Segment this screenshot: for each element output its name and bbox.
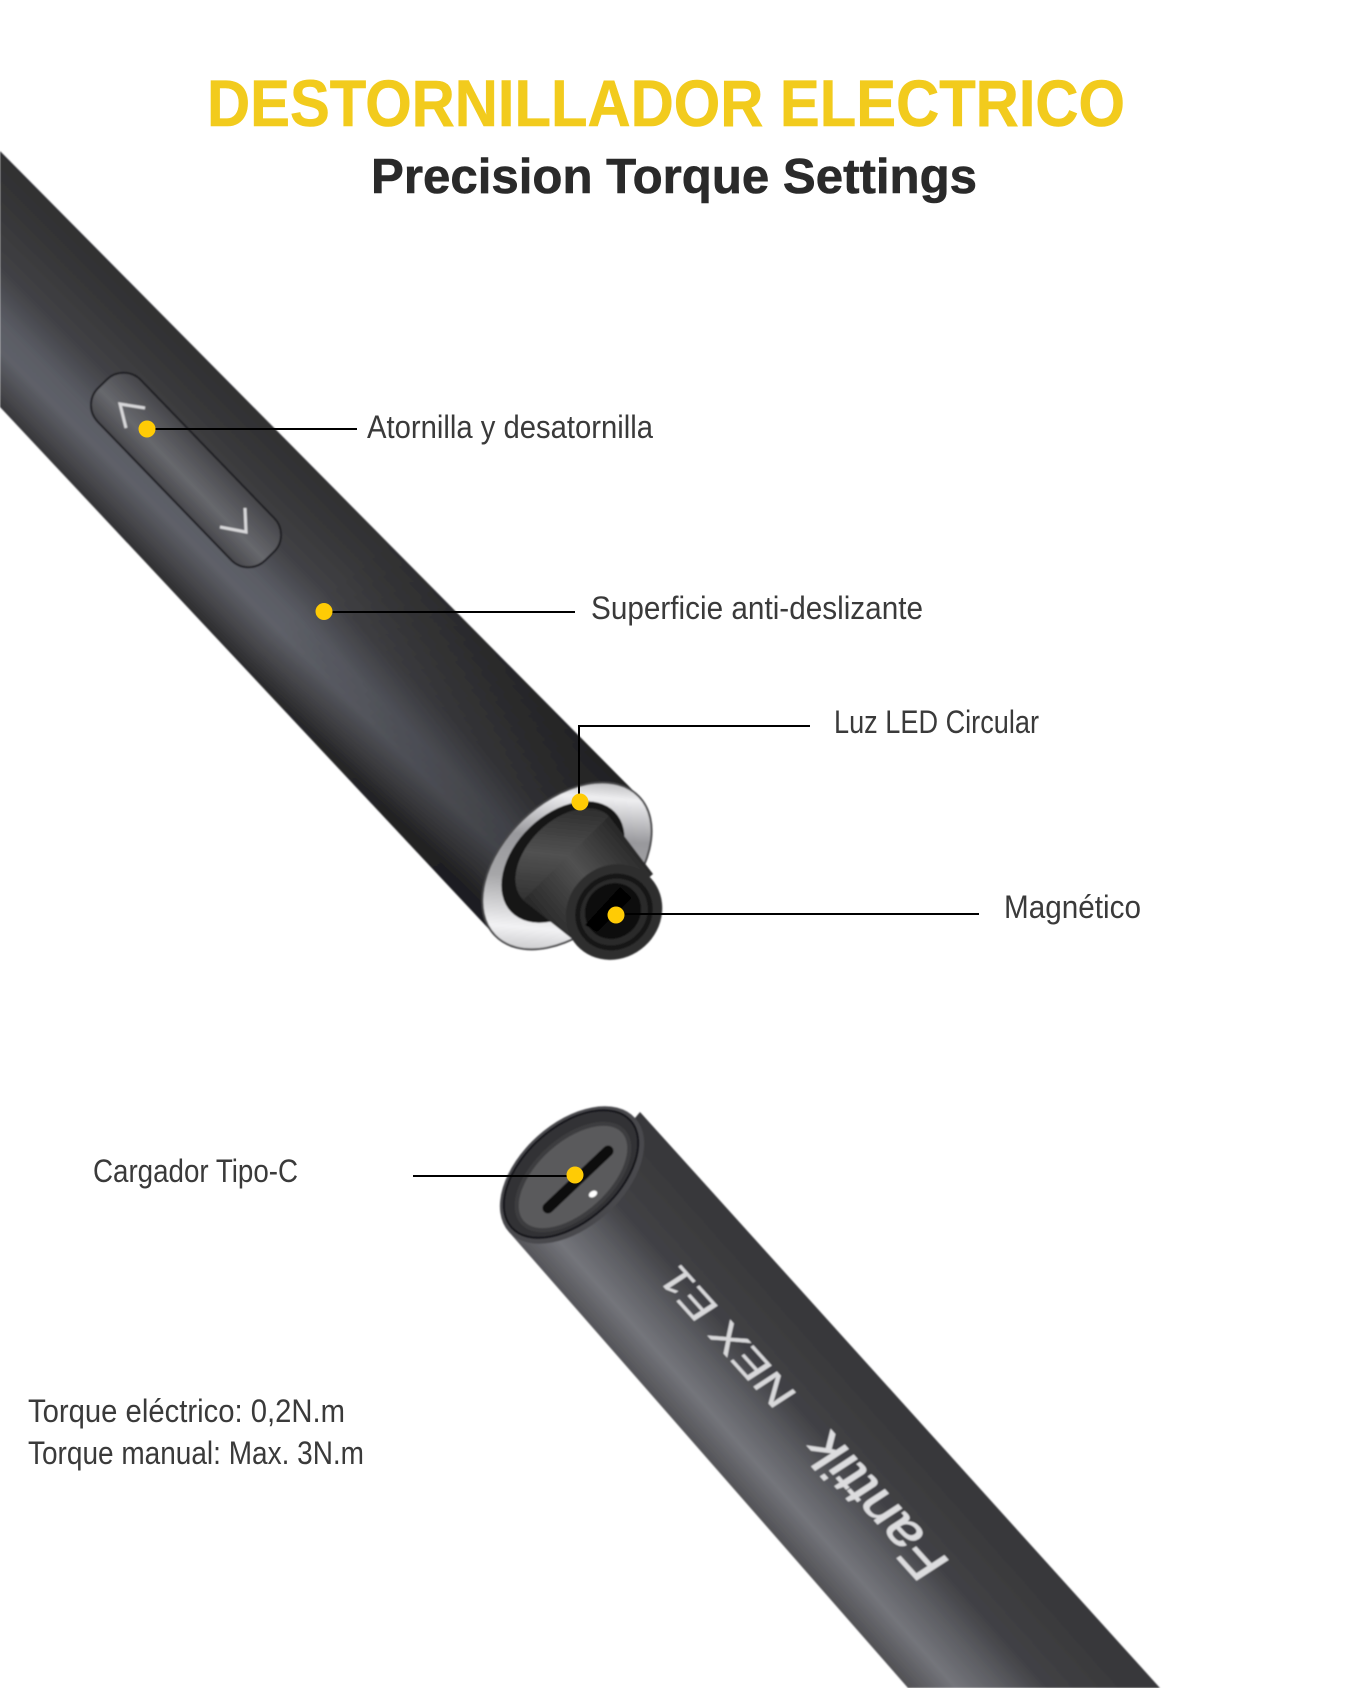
callout: Atornilla y desatornilla: Atornilla y desatornilla (367, 409, 653, 445)
callout: Luz LED Circular (572, 704, 1039, 810)
upper screwdriver illustration (0, 151, 683, 982)
bit socket (546, 844, 682, 980)
callout: Atornilla y desatornilla (138, 409, 653, 445)
ring recess (478, 777, 648, 947)
charging end cap (474, 1079, 670, 1271)
callout: Cargador Tipo-C (93, 1153, 584, 1189)
barrel (509, 1112, 1160, 1688)
brand text on barrel: Fanttik (789, 1422, 961, 1590)
torque specifications: Torque manual: Max. 3N.m (28, 1435, 364, 1471)
callout: Cargador Tipo-C: Cargador Tipo-C (93, 1153, 298, 1189)
nozzle (496, 789, 653, 942)
callout: Luz LED Circular: Luz LED Circular (834, 704, 1039, 740)
callout: Magnético (608, 889, 1141, 925)
torque specifications (28, 1393, 364, 1471)
callout: Superficie anti-deslizante (316, 590, 923, 626)
callout: Superficie anti-deslizante: Superficie anti-deslizante (591, 590, 923, 626)
direction button (81, 363, 291, 577)
title: DESTORNILLADOR ELECTRICO (207, 66, 1125, 140)
model text on barrel: NEX E1 (649, 1258, 806, 1415)
silver LED ring (451, 750, 683, 982)
lower screwdriver illustration (474, 1079, 1160, 1688)
callout: Magnético: Magnético (1004, 889, 1141, 925)
torque specifications: Torque eléctrico: 0,2N.m (28, 1393, 345, 1429)
barrel (0, 151, 639, 936)
subtitle: Precision Torque Settings (371, 150, 977, 204)
